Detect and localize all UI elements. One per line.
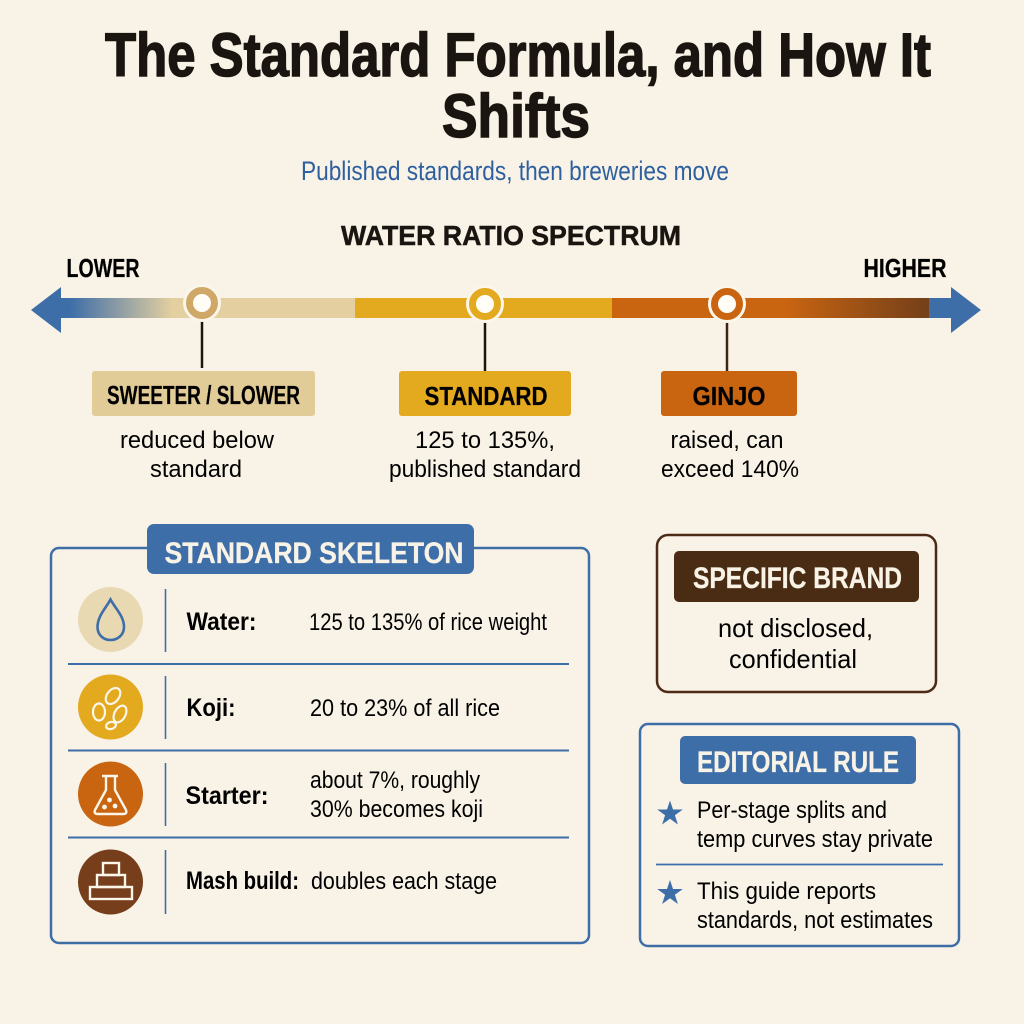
heading: editorial rule xyxy=(680,736,916,784)
row: koji: Koji: xyxy=(186,694,236,722)
category: ginjo xyxy=(661,371,799,483)
rule text two xyxy=(697,878,933,934)
row: starter: Starter: xyxy=(186,782,268,810)
marker: ginjo xyxy=(708,285,746,371)
arrow: left xyxy=(31,287,71,333)
icon: koji grains xyxy=(78,674,143,740)
icon: water drop xyxy=(78,587,143,652)
row: koji xyxy=(186,694,500,722)
row: starter xyxy=(186,767,483,823)
category: standard: 125 to 135%, xyxy=(415,427,555,454)
icon: star xyxy=(657,880,683,904)
category: standard xyxy=(389,371,581,483)
heading: specific brand xyxy=(674,551,919,602)
panel: specific brand xyxy=(657,535,936,692)
rule text one xyxy=(697,797,933,853)
row: water: 125 to 135% of rice weight xyxy=(309,609,547,636)
panel: specific brand: confidential xyxy=(729,644,857,674)
heading: specific brand: SPECIFIC BRAND xyxy=(693,562,902,595)
row: mash build: Mash build: xyxy=(186,867,299,895)
label: lower: LOWER xyxy=(66,253,140,283)
row: starter: about 7%, roughly xyxy=(310,767,480,794)
heading: standard skeleton xyxy=(147,524,474,574)
label: higher: HIGHER xyxy=(864,253,947,283)
title xyxy=(105,21,931,150)
category: ginjo: exceed 140% xyxy=(661,456,799,483)
category: standard: published standard xyxy=(389,456,581,483)
marker: sweeter xyxy=(183,284,221,368)
category: sweeter: reduced below xyxy=(120,427,275,454)
rule text one: temp curves stay private xyxy=(697,826,933,853)
category: sweeter: SWEETER / SLOWER xyxy=(107,380,300,410)
row: mash build xyxy=(186,867,497,895)
heading: editorial rule: EDITORIAL RULE xyxy=(697,746,899,779)
spectrum heading: WATER RATIO SPECTRUM xyxy=(341,220,681,251)
panel: specific brand: not disclosed, xyxy=(718,613,873,643)
icon: star xyxy=(657,800,683,824)
title: Shifts xyxy=(442,82,590,150)
heading: standard skeleton: STANDARD SKELETON xyxy=(164,537,464,570)
marker: standard xyxy=(466,285,504,371)
panel: editorial rule xyxy=(640,724,959,946)
rule text two: standards, not estimates xyxy=(697,907,933,934)
icon: mash stack xyxy=(78,850,143,914)
category: standard: STANDARD xyxy=(424,381,548,411)
rule text one: Per-stage splits and xyxy=(697,797,887,824)
row: mash build: doubles each stage xyxy=(311,868,497,895)
rule text two: This guide reports xyxy=(697,878,876,905)
panel: standard skeleton xyxy=(51,524,589,943)
icon: flask xyxy=(78,762,143,826)
subtitle: Published standards, then breweries move xyxy=(301,156,729,186)
category: ginjo: GINJO xyxy=(692,381,766,411)
row: water: Water: xyxy=(186,608,256,636)
row: koji: 20 to 23% of all rice xyxy=(310,695,500,722)
spectrum bar xyxy=(31,287,981,333)
category: sweeter: standard xyxy=(150,456,242,483)
row: starter: 30% becomes koji xyxy=(310,796,483,823)
arrow: right xyxy=(929,287,981,333)
row: water xyxy=(186,608,547,636)
category: ginjo: raised, can xyxy=(670,427,784,454)
category: sweeter xyxy=(92,371,315,483)
